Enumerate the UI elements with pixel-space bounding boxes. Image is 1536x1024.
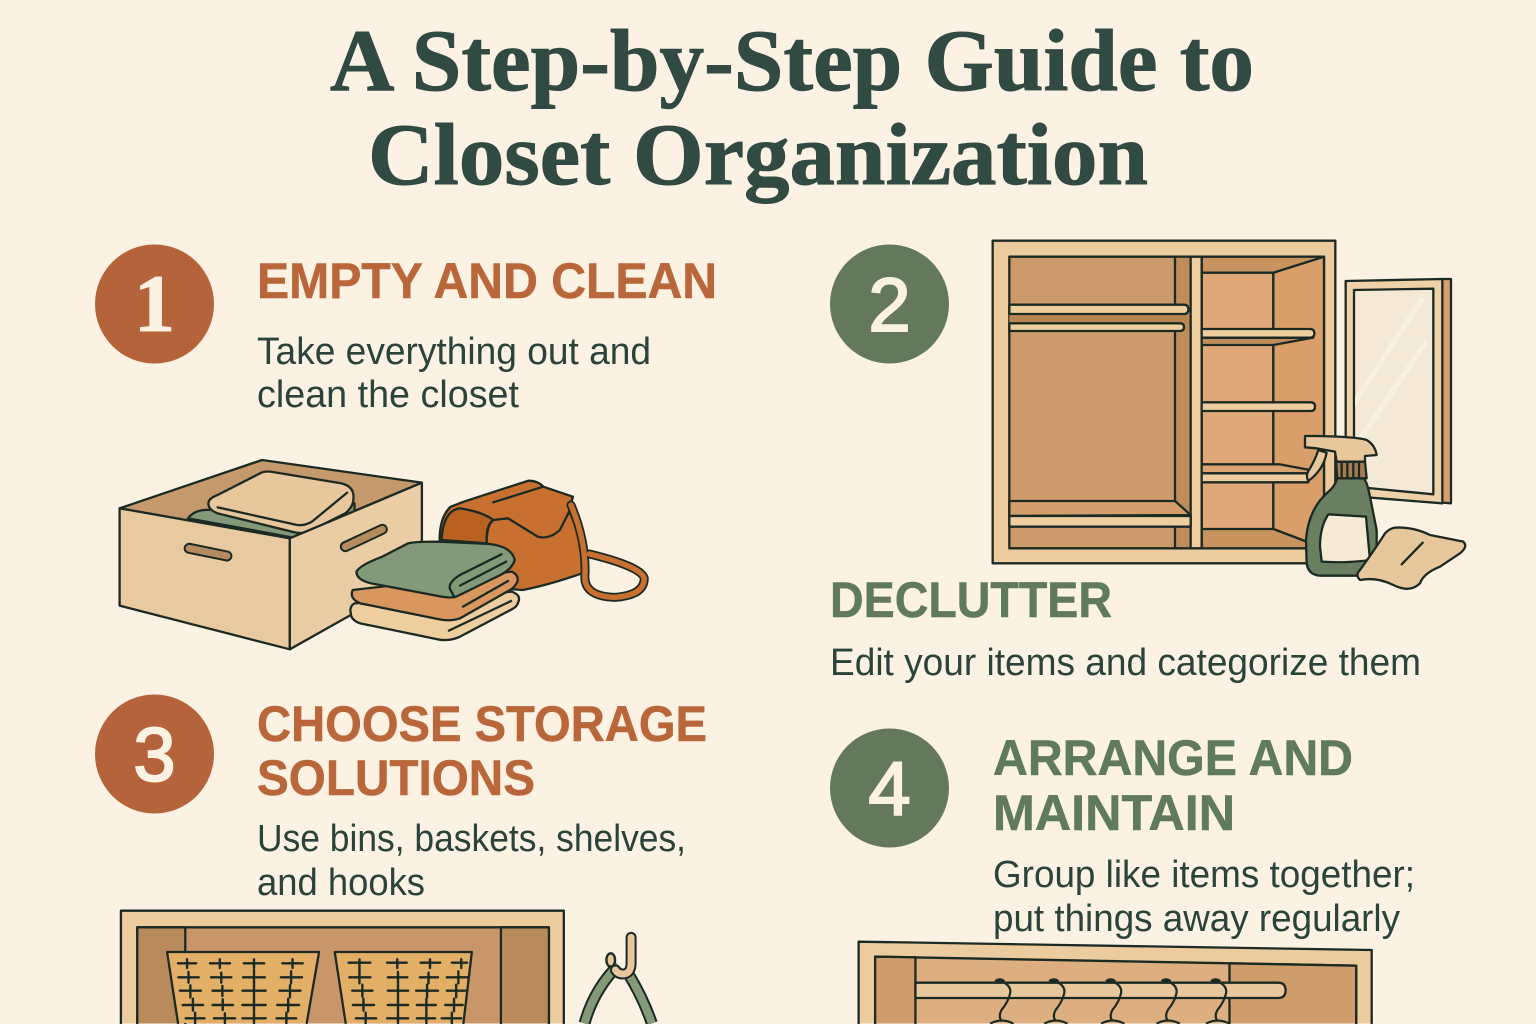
shelf frame — [121, 911, 564, 1023]
closet frame and interior — [993, 241, 1335, 563]
illustration: box, folded clothes and bag — [120, 460, 644, 649]
closet left rods and shelf — [1009, 305, 1191, 527]
step 1 description — [257, 331, 651, 416]
step 2 heading: DECLUTTER — [830, 572, 1112, 628]
step 2 number badge — [830, 244, 949, 364]
step 1 description: clean the closet — [257, 374, 519, 416]
icon: folded clothes stack — [350, 542, 519, 640]
step 3 description — [257, 818, 686, 904]
step 3 number badge — [95, 694, 214, 814]
step 3 number badge: 3 — [133, 713, 176, 798]
step 3 heading: SOLUTIONS — [257, 750, 535, 806]
step 4 number badge — [830, 728, 949, 848]
icon: cardboard box — [120, 460, 422, 649]
title: A Step-by-Step Guide to — [330, 13, 1254, 110]
icon: left basket — [167, 952, 319, 1023]
illustration: empty closet, mirror, spray bottle and cloth — [993, 241, 1465, 589]
icon: cleaning cloth — [1357, 528, 1465, 589]
step 3 description: and hooks — [257, 862, 425, 904]
icon: right basket — [335, 952, 472, 1023]
closet frame — [859, 942, 1372, 1023]
step 4 heading: ARRANGE AND — [993, 730, 1353, 786]
step 4 description: put things away regularly — [993, 898, 1400, 940]
illustration: storage shelf with baskets and hook — [121, 911, 652, 1023]
step 4 heading — [993, 730, 1353, 841]
mirror — [1346, 279, 1451, 503]
step 2 number badge: 2 — [868, 263, 911, 348]
step 1 heading: EMPTY AND CLEAN — [257, 253, 717, 309]
step 4 number badge: 4 — [868, 747, 911, 832]
icon: bag — [440, 481, 644, 597]
step 2 description: Edit your items and categorize them — [830, 642, 1421, 684]
step 3 heading — [257, 696, 707, 806]
icon: hook with hanging bag — [585, 937, 652, 1023]
step 4 description — [993, 854, 1415, 940]
icon: spray bottle — [1305, 436, 1377, 576]
closet right shelves — [1202, 329, 1315, 482]
step 3 heading: CHOOSE STORAGE — [257, 696, 707, 752]
step 1 number badge: 1 — [134, 258, 175, 349]
step 4 description: Group like items together; — [993, 854, 1415, 896]
step 1 number badge — [95, 244, 214, 364]
hanging rod — [915, 983, 1286, 998]
step 4 heading: MAINTAIN — [993, 785, 1235, 841]
title — [330, 13, 1254, 204]
step 1 description: Take everything out and — [257, 331, 651, 373]
illustration: organized closet with hangers — [859, 942, 1372, 1024]
title: Closet Organization — [368, 107, 1148, 204]
hangers — [990, 980, 1229, 1024]
step 3 description: Use bins, baskets, shelves, — [257, 818, 686, 860]
